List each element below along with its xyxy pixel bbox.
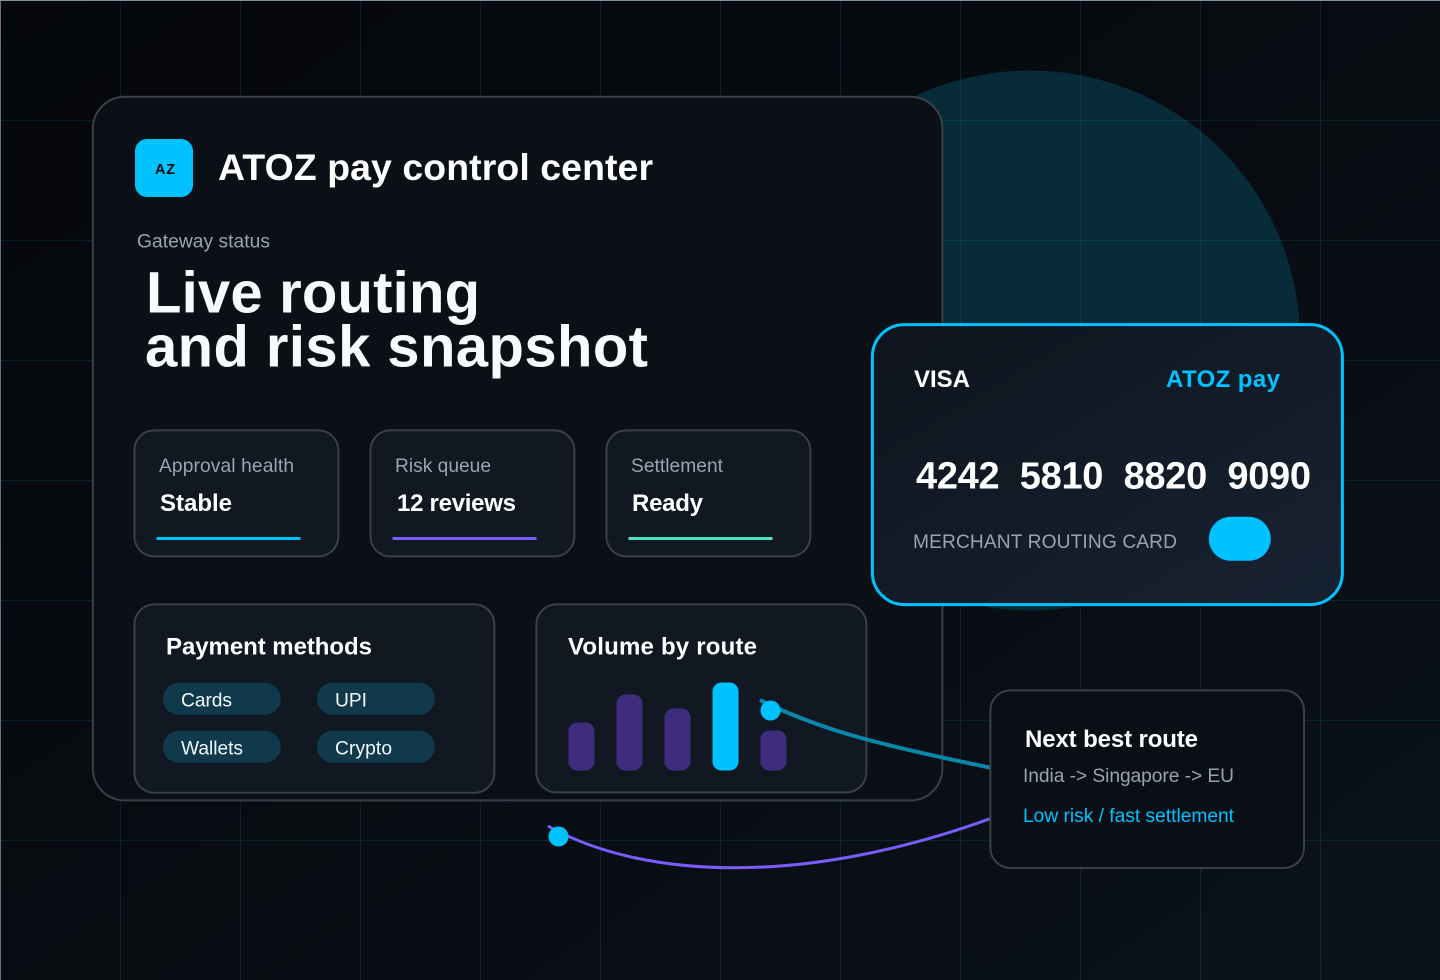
stat card: approval health: Approval health xyxy=(159,456,294,477)
icon: AZ logo xyxy=(135,139,193,197)
payment card: VISA xyxy=(914,366,970,393)
pill: cards xyxy=(163,683,281,715)
stat card: settlement: Settlement xyxy=(631,456,724,477)
panel: payment methods xyxy=(134,604,494,793)
title: ATOZ pay control center xyxy=(218,146,653,188)
pill: UPI xyxy=(317,683,435,715)
pill: crypto: Crypto xyxy=(335,738,392,760)
pill: crypto xyxy=(317,731,435,763)
pill: cards: Cards xyxy=(181,690,232,712)
stat card: risk queue: 12 reviews xyxy=(397,490,516,517)
panel: next best route xyxy=(990,690,1304,868)
panel: next best route: India -> Singapore -> EU xyxy=(1023,766,1234,787)
decorative circle xyxy=(760,70,1300,610)
stat card: settlement xyxy=(606,430,810,556)
card chip xyxy=(1209,517,1271,561)
connector: volume to route xyxy=(760,700,992,768)
panel: control center xyxy=(93,97,942,800)
payment card xyxy=(872,325,1342,605)
panel: volume by route: Volume by route xyxy=(568,634,757,660)
bar chart xyxy=(568,682,786,770)
payment card: ATOZ pay xyxy=(1166,366,1281,393)
stat card: risk queue xyxy=(370,430,574,556)
panel: next best route: Low risk / fast settlement xyxy=(1023,806,1235,827)
panel: payment methods: Payment methods xyxy=(166,634,372,660)
pill: wallets: Wallets xyxy=(181,738,243,760)
headline: Live routing xyxy=(146,261,480,326)
headline: and risk snapshot xyxy=(145,315,648,380)
stat card: settlement: Ready xyxy=(632,490,704,517)
pill: wallets xyxy=(163,731,281,763)
stat card: approval health xyxy=(134,430,338,556)
icon: AZ logo: AZ xyxy=(155,162,175,178)
panel: next best route: Next best route xyxy=(1025,726,1198,753)
panel: volume by route xyxy=(536,604,866,792)
headline xyxy=(145,261,648,380)
stat card: approval health: Stable xyxy=(160,490,232,517)
pill: UPI: UPI xyxy=(335,690,367,712)
payment card: MERCHANT ROUTING CARD xyxy=(913,532,1177,553)
gateway status label: Gateway status xyxy=(137,232,270,252)
payment card: 4242 5810 8820 9090 xyxy=(916,456,1311,498)
stat card: risk queue: Risk queue xyxy=(395,456,491,477)
connector: panel to route xyxy=(548,818,992,868)
